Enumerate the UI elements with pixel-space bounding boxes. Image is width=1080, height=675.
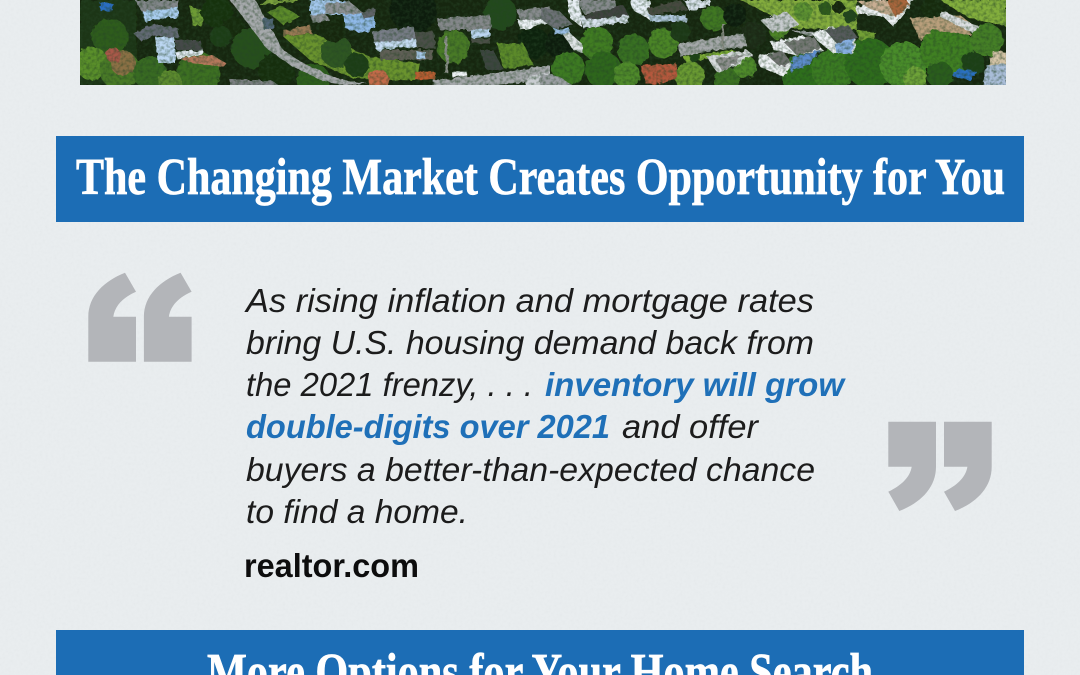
quote text: double-digits over 2021 [246,408,610,445]
houses [142,7,178,22]
heading banner: The Changing Market Creates Opportunity for You [56,136,1024,222]
quote text: the 2021 frenzy, . . . [246,366,533,403]
quote text: to find a home. [246,493,468,530]
quote source: realtor.com: realtor.com [244,547,419,584]
icon: closing quotation mark [888,422,992,511]
driveway [678,33,747,57]
icon: opening quotation mark [88,273,192,362]
left section of photo [80,0,550,85]
quote text [244,282,846,530]
quote text: inventory will grow [545,366,846,403]
vehicles and accents [415,72,435,80]
houses [540,7,573,28]
big bright trees [782,53,818,85]
quote text: bring U.S. housing demand back from [246,324,814,361]
photo grain [80,0,1006,85]
quote text: buyers a better-than-expected chance [246,451,815,488]
photo: aerial view of suburban neighbourhood [80,0,1006,85]
quote text: and offer [622,408,760,445]
road [230,0,367,86]
heading banner: More Options for Your Home Search [56,630,1024,675]
quote text: As rising inflation and mortgage rates [244,282,814,319]
right section of photo [538,0,1006,85]
